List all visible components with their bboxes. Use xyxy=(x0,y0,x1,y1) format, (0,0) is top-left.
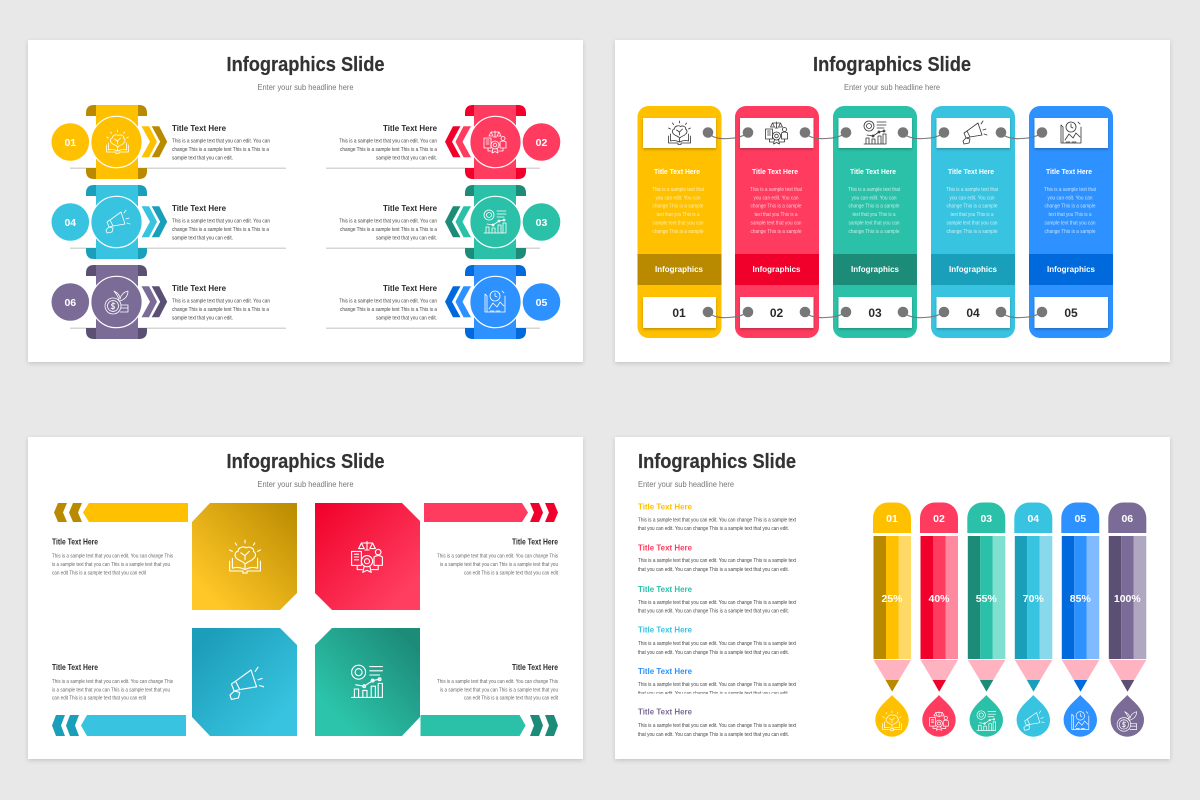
column 04: This is a sample text that xyxy=(946,187,999,193)
pencil 04 xyxy=(1014,502,1052,737)
column 01: Title Text Here xyxy=(654,167,700,176)
column 05 xyxy=(1029,106,1113,338)
column 01: Infographics xyxy=(655,264,703,274)
arrow bar: cyan xyxy=(52,715,186,736)
pencil 02: 40% xyxy=(928,593,950,605)
step 06: This is a sample text that you can edit. You can xyxy=(172,299,270,305)
list item 03: Title Text Here xyxy=(638,584,692,594)
list item 05 xyxy=(636,666,801,697)
pencil 03: 03 xyxy=(980,513,992,525)
column 04: Infographics xyxy=(949,264,997,274)
step 02: This is a sample text that you can edit. You can xyxy=(339,139,437,145)
panel: top-right slide xyxy=(615,40,1170,362)
step 06: sample text that you can edit. xyxy=(172,316,233,322)
column 01: text that you This is a xyxy=(656,212,700,218)
column 02: change This is a sample xyxy=(750,204,802,210)
arrow bar: yellow xyxy=(54,503,188,522)
column 05: text that you This is a xyxy=(1048,212,1092,218)
pencil 02 xyxy=(920,502,958,737)
heading: Infographics Slide xyxy=(813,54,971,76)
step 06: change This is a sample text This is a This is a xyxy=(172,307,269,313)
step 03: 03 xyxy=(536,217,547,229)
list item 01: that you can edit. You can change This is a sample text that you can edit. xyxy=(638,526,789,532)
text block: top right xyxy=(437,536,559,576)
heading: Infographics Slide xyxy=(226,451,384,473)
list item 01 xyxy=(638,502,797,532)
step 06: Title Text Here xyxy=(172,283,226,293)
text block: top left: This is a sample text that you can edit. You can change This xyxy=(52,554,173,560)
step 01: Title Text Here xyxy=(172,123,226,133)
text block: bottom right: Title Text Here xyxy=(512,662,558,672)
step 03: sample text that you can edit. xyxy=(376,236,437,242)
column 03 xyxy=(833,106,917,338)
list item 06: Title Text Here xyxy=(638,707,692,717)
step 03 xyxy=(326,185,560,259)
list item 04: This is a sample text that you can edit. You can change This is a sample text xyxy=(638,641,797,647)
step 02: Title Text Here xyxy=(383,123,437,133)
text block: top left xyxy=(52,536,173,576)
column 03: sample text that you can xyxy=(848,220,900,226)
column 01: sample text that you can xyxy=(652,220,704,226)
column 01: 01 xyxy=(672,306,686,320)
list item 05: Title Text Here xyxy=(638,666,692,676)
panel: bottom-left slide xyxy=(28,437,583,759)
list item 04 xyxy=(638,625,797,656)
column 02: Infographics xyxy=(752,264,801,274)
column 01: you can edit. You can xyxy=(656,196,701,202)
column 02: 02 xyxy=(770,306,783,320)
step 02: change This is a sample text This is a This is a xyxy=(340,147,437,153)
text block: bottom right: is a sample text that you can This is a sample text that you xyxy=(440,688,558,694)
sub headline: Enter your sub headline here xyxy=(844,82,940,92)
panel: top-left slide xyxy=(28,40,583,362)
list item 03 xyxy=(638,584,797,614)
list item 06 xyxy=(638,707,797,738)
column 01: change This is a sample xyxy=(652,204,704,210)
text block: bottom left: This is a sample text that you can edit. You can change This xyxy=(52,679,173,685)
column 04: change This is a sample xyxy=(946,229,998,235)
step 04 xyxy=(52,185,286,259)
pencil 06 xyxy=(1108,502,1146,737)
step 04: Title Text Here xyxy=(172,203,226,213)
step 06: 06 xyxy=(64,297,76,309)
column 04: change This is a sample xyxy=(946,204,998,210)
pencil 03 xyxy=(967,502,1005,737)
column 05: change This is a sample xyxy=(1044,204,1096,210)
step 04: 04 xyxy=(64,217,76,229)
text block: bottom left: can edit This is a sample text that you can edit xyxy=(52,696,147,702)
column 05: Title Text Here xyxy=(1046,167,1092,176)
column 03: Infographics xyxy=(851,264,899,274)
list item 05: This is a sample text that you can edit. You can change This is a sample text xyxy=(638,682,797,688)
text block: top right: is a sample text that you can This is a sample text that you xyxy=(440,562,558,568)
column 02: sample text that you can xyxy=(750,220,802,226)
text block: top right: This is a sample text that you can edit. You can change This xyxy=(437,554,558,560)
column 02: Title Text Here xyxy=(752,167,798,176)
list item 02 xyxy=(638,542,797,573)
column 01 xyxy=(638,106,722,338)
column 03: change This is a sample xyxy=(848,204,900,210)
step 03: Title Text Here xyxy=(383,203,437,213)
step 05: change This is a sample text This is a This is a xyxy=(340,307,437,313)
list item 05: that you can edit. You can change This is a sample text that you can edit. xyxy=(638,691,789,697)
pencil 01 xyxy=(873,502,911,737)
list item 06: that you can edit. You can change This is a sample text that you can edit. xyxy=(638,732,789,738)
heading: Infographics Slide xyxy=(226,54,384,76)
column 05: 05 xyxy=(1064,306,1078,320)
column 03: change This is a sample xyxy=(848,229,900,235)
list item 06: This is a sample text that you can edit. You can change This is a sample text xyxy=(638,723,797,729)
step 04: sample text that you can edit. xyxy=(172,236,233,242)
column 03: text that you This is a xyxy=(852,212,896,218)
step 05: Title Text Here xyxy=(383,283,437,293)
pencil 06: 06 xyxy=(1121,513,1133,525)
column 05: Infographics xyxy=(1047,264,1095,274)
text block: top left: Title Text Here xyxy=(52,536,98,546)
pencil 05 xyxy=(1061,502,1099,737)
column 01: This is a sample text that xyxy=(652,187,705,193)
text block: bottom left xyxy=(52,662,173,702)
column 04: text that you This is a xyxy=(950,212,994,218)
list item 03: This is a sample text that you can edit. You can change This is a sample text xyxy=(638,600,797,606)
pencil 04: 04 xyxy=(1027,513,1039,525)
column 02: you can edit. You can xyxy=(754,196,799,202)
step 02: sample text that you can edit. xyxy=(376,156,437,162)
list item 04: Title Text Here xyxy=(638,625,692,635)
panel: bottom-right slide xyxy=(615,437,1170,759)
block: green tile xyxy=(315,628,420,736)
pencil 06: 100% xyxy=(1114,593,1141,605)
column 04: sample text that you can xyxy=(946,220,998,226)
column 04: Title Text Here xyxy=(948,167,994,176)
step 03: change This is a sample text This is a This is a xyxy=(340,227,437,233)
column 05: change This is a sample xyxy=(1044,229,1096,235)
text block: bottom left: is a sample text that you can This is a sample text that you xyxy=(52,688,170,694)
column 04: 04 xyxy=(966,306,980,320)
column 05: you can edit. You can xyxy=(1048,196,1093,202)
pencil 01: 01 xyxy=(886,513,898,525)
column 01: change This is a sample xyxy=(652,229,704,235)
list item 02: Title Text Here xyxy=(638,542,692,552)
pencil 05: 05 xyxy=(1074,513,1086,525)
list item 03: that you can edit. You can change This is a sample text that you can edit. xyxy=(638,608,789,614)
column 03: 03 xyxy=(868,306,882,320)
column 05: This is a sample text that xyxy=(1044,187,1097,193)
pencil 05: 85% xyxy=(1070,593,1091,605)
step 05 xyxy=(326,265,560,339)
arrow bar: red xyxy=(424,503,558,522)
step 03: This is a sample text that you can edit. You can xyxy=(339,219,437,225)
column 04: you can edit. You can xyxy=(950,196,995,202)
pencil 02: 02 xyxy=(933,513,945,525)
step 04: This is a sample text that you can edit. You can xyxy=(172,219,270,225)
connectors xyxy=(708,133,1042,318)
step 04: change This is a sample text This is a This is a xyxy=(172,227,269,233)
step 02: 02 xyxy=(536,137,547,149)
step 05: 05 xyxy=(536,297,547,309)
pencil 04: 70% xyxy=(1023,593,1044,605)
column 02: change This is a sample xyxy=(750,229,802,235)
step 01 xyxy=(52,105,286,179)
step 05: sample text that you can edit. xyxy=(376,316,437,322)
text block: bottom right: This is a sample text that you can edit. You can change This xyxy=(437,679,558,685)
column 04 xyxy=(931,106,1015,338)
step 01: sample text that you can edit. xyxy=(172,156,233,162)
arrow bar: green xyxy=(420,715,558,736)
list item 01: This is a sample text that you can edit. You can change This is a sample text xyxy=(638,518,797,524)
pencil 03: 55% xyxy=(976,593,997,605)
sub headline: Enter your sub headline here xyxy=(258,479,354,489)
step 02 xyxy=(326,105,560,179)
list item 04: that you can edit. You can change This is a sample text that you can edit. xyxy=(638,650,789,656)
pencil 01: 25% xyxy=(881,593,903,605)
text block: top left: is a sample text that you can This is a sample text that you xyxy=(52,562,170,568)
heading: Infographics Slide xyxy=(638,451,796,473)
block: cyan tile xyxy=(192,628,297,736)
column 02: text that you This is a xyxy=(754,212,798,218)
block: gold tile xyxy=(192,503,297,610)
text block: bottom left: Title Text Here xyxy=(52,662,98,672)
step 01: This is a sample text that you can edit. You can xyxy=(172,139,270,145)
connector dots xyxy=(703,127,1047,317)
sub headline: Enter your sub headline here xyxy=(258,82,354,92)
sub headline: Enter your sub headline here xyxy=(638,479,734,489)
column 05: sample text that you can xyxy=(1044,220,1096,226)
text block: bottom right: can edit This is a sample text that you can edit xyxy=(464,696,559,702)
step 06 xyxy=(52,265,286,339)
column 03: This is a sample text that xyxy=(848,187,901,193)
list item 01: Title Text Here xyxy=(638,502,692,512)
text block: top left: can edit This is a sample text that you can edit xyxy=(52,570,147,576)
list item 02: This is a sample text that you can edit. You can change This is a sample text xyxy=(638,558,797,564)
column 02: This is a sample text that xyxy=(750,187,803,193)
text block: top right: Title Text Here xyxy=(512,536,558,546)
column 02 xyxy=(735,106,819,338)
step 01: 01 xyxy=(64,137,76,149)
column 03: you can edit. You can xyxy=(852,196,897,202)
step 01: change This is a sample text This is a This is a xyxy=(172,147,269,153)
column 03: Title Text Here xyxy=(850,167,896,176)
block: red tile xyxy=(315,503,420,610)
list item 02: that you can edit. You can change This is a sample text that you can edit. xyxy=(638,567,789,573)
text block: bottom right xyxy=(437,662,559,702)
text block: top right: can edit This is a sample text that you can edit xyxy=(464,570,559,576)
step 05: This is a sample text that you can edit. You can xyxy=(339,299,437,305)
